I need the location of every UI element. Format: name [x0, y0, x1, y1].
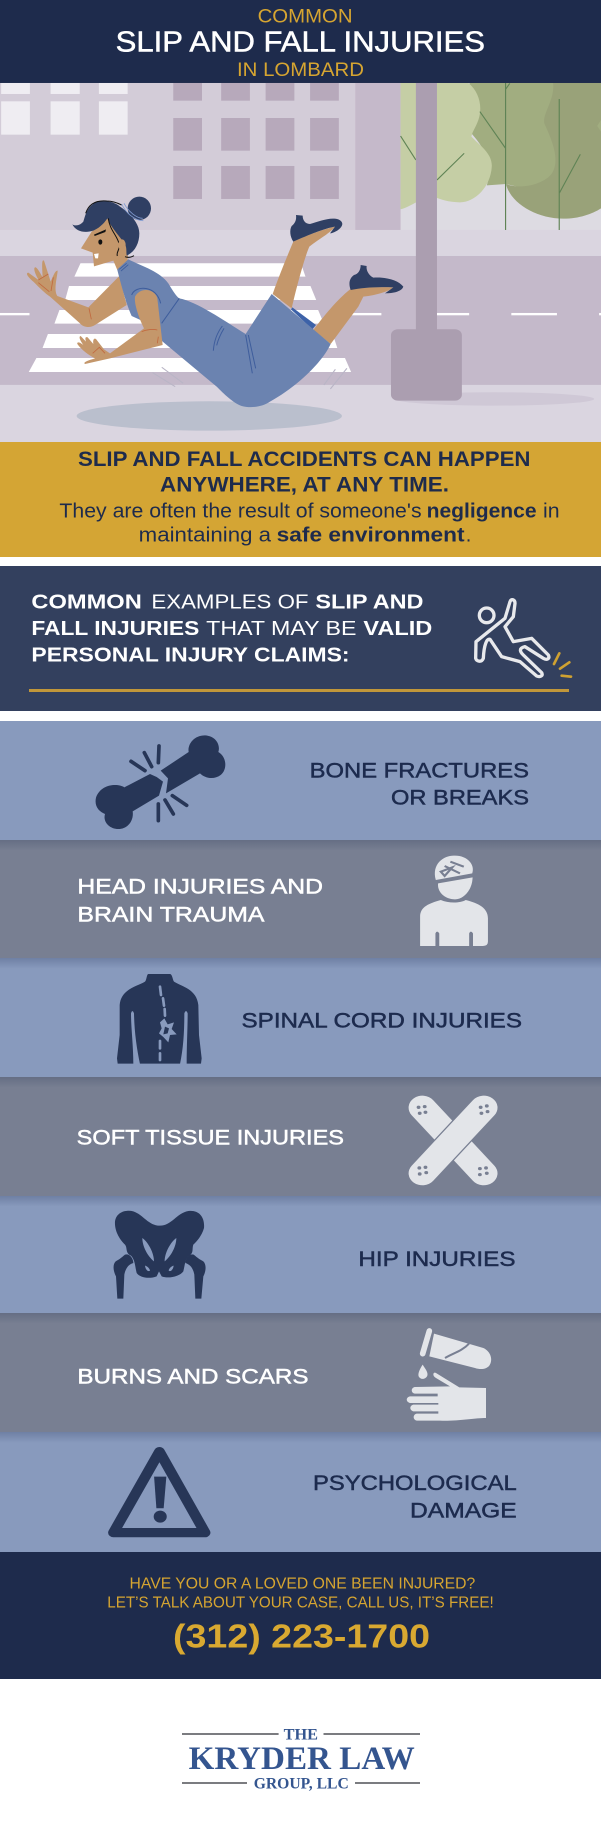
- intro text: maintaining a: [139, 525, 272, 547]
- panel: common examples heading: [0, 566, 601, 711]
- street and pavements: [0, 230, 601, 442]
- panel: call to action footer: [0, 1552, 601, 1679]
- examples heading text: [31, 590, 432, 667]
- label: [77, 874, 323, 927]
- legs and shoes: [273, 215, 403, 344]
- heading: in lombard: IN LOMBARD: [237, 59, 364, 81]
- logo: the kryder law group: [182, 1726, 420, 1793]
- intro heading: ANYWHERE, AT ANY TIME.: [160, 474, 449, 497]
- icon: back with injured spine: [117, 974, 202, 1064]
- examples heading text: VALID: [363, 617, 432, 640]
- dress folds and sleeve: [132, 288, 256, 373]
- logo: the kryder law group: KRYDER LAW: [189, 1741, 415, 1777]
- headband and hair lines: [86, 201, 134, 257]
- dress: [117, 259, 331, 407]
- intro text: [59, 500, 560, 547]
- label: BURNS AND SCARS: [77, 1364, 309, 1388]
- neck and collar: [113, 255, 128, 270]
- trees: [401, 83, 601, 230]
- panel: soft tissue injuries: [0, 1077, 601, 1196]
- label: SPINAL CORD INJURIES: [242, 1009, 522, 1033]
- face: [81, 218, 128, 266]
- woman falling: [27, 197, 403, 407]
- intro text: in: [543, 500, 560, 522]
- panel: bone fractures: [0, 721, 601, 840]
- call to action text: LET’S TALK ABOUT YOUR CASE, CALL US, IT’S FREE!: [107, 1594, 494, 1611]
- panel: gold intro statement: [0, 442, 601, 557]
- logo: the kryder law group: GROUP, LLC: [254, 1776, 349, 1793]
- back arm and hand: [27, 260, 127, 327]
- building with windows: [0, 83, 401, 230]
- label: OR BREAKS: [391, 785, 529, 809]
- intro text: negligence: [427, 500, 537, 522]
- intro text: safe environment: [277, 525, 465, 547]
- hair: [72, 201, 139, 256]
- label: [310, 758, 529, 809]
- examples heading text: EXAMPLES OF: [151, 590, 308, 613]
- header: title banner: [0, 0, 601, 95]
- icon: crossed bandages: [417, 1104, 489, 1176]
- label: PSYCHOLOGICAL: [313, 1471, 517, 1495]
- intro text: They are often the result of someone's: [59, 500, 422, 522]
- panel: psychological damage: [0, 1432, 601, 1552]
- label: SOFT TISSUE INJURIES: [77, 1125, 344, 1149]
- icon: warning triangle: [113, 1452, 205, 1533]
- icon: broken bone: [96, 735, 225, 829]
- illustration: woman slipping on a street crossing: [0, 83, 601, 442]
- examples heading text: SLIP AND: [315, 590, 424, 613]
- lamp post: [391, 83, 462, 401]
- heading: common: COMMON: [258, 6, 353, 28]
- arm creases: [38, 274, 158, 353]
- panel: head injuries: [0, 840, 601, 958]
- panel: spinal cord injuries: [0, 958, 601, 1077]
- panel: burns and scars: [0, 1313, 601, 1432]
- label: HEAD INJURIES AND: [77, 874, 323, 898]
- logo: the kryder law group: THE: [284, 1726, 318, 1743]
- hair bun: [128, 197, 151, 220]
- icon: person with head bandage: [420, 856, 488, 946]
- label: DAMAGE: [410, 1499, 517, 1523]
- label: BRAIN TRAUMA: [77, 903, 265, 927]
- street scene background: [0, 83, 601, 442]
- examples heading text: FALL INJURIES: [31, 617, 199, 640]
- label: HIP INJURIES: [358, 1247, 516, 1271]
- icon: chemical dripping on hand: [407, 1331, 491, 1421]
- label: BONE FRACTURES: [310, 758, 529, 782]
- call to action text: [107, 1575, 494, 1611]
- phone number: (312) 223-1700: [173, 1618, 430, 1655]
- examples heading text: THAT MAY BE: [206, 617, 356, 640]
- intro text: .: [466, 525, 471, 547]
- panel: hip injuries: [0, 1196, 601, 1313]
- intro heading: [78, 448, 530, 497]
- icon: pelvis: [114, 1211, 206, 1299]
- examples heading text: PERSONAL INJURY CLAIMS:: [31, 644, 350, 667]
- intro heading: SLIP AND FALL ACCIDENTS CAN HAPPEN: [78, 448, 530, 471]
- front arm and hand: [77, 290, 163, 364]
- call to action text: HAVE YOU OR A LOVED ONE BEEN INJURED?: [130, 1575, 476, 1592]
- heading: slip and fall injuries: SLIP AND FALL INJURIES: [116, 27, 485, 59]
- examples heading text: COMMON: [31, 590, 142, 613]
- label: [313, 1471, 517, 1523]
- motion lines: [153, 367, 347, 389]
- icon: falling person: [476, 600, 571, 677]
